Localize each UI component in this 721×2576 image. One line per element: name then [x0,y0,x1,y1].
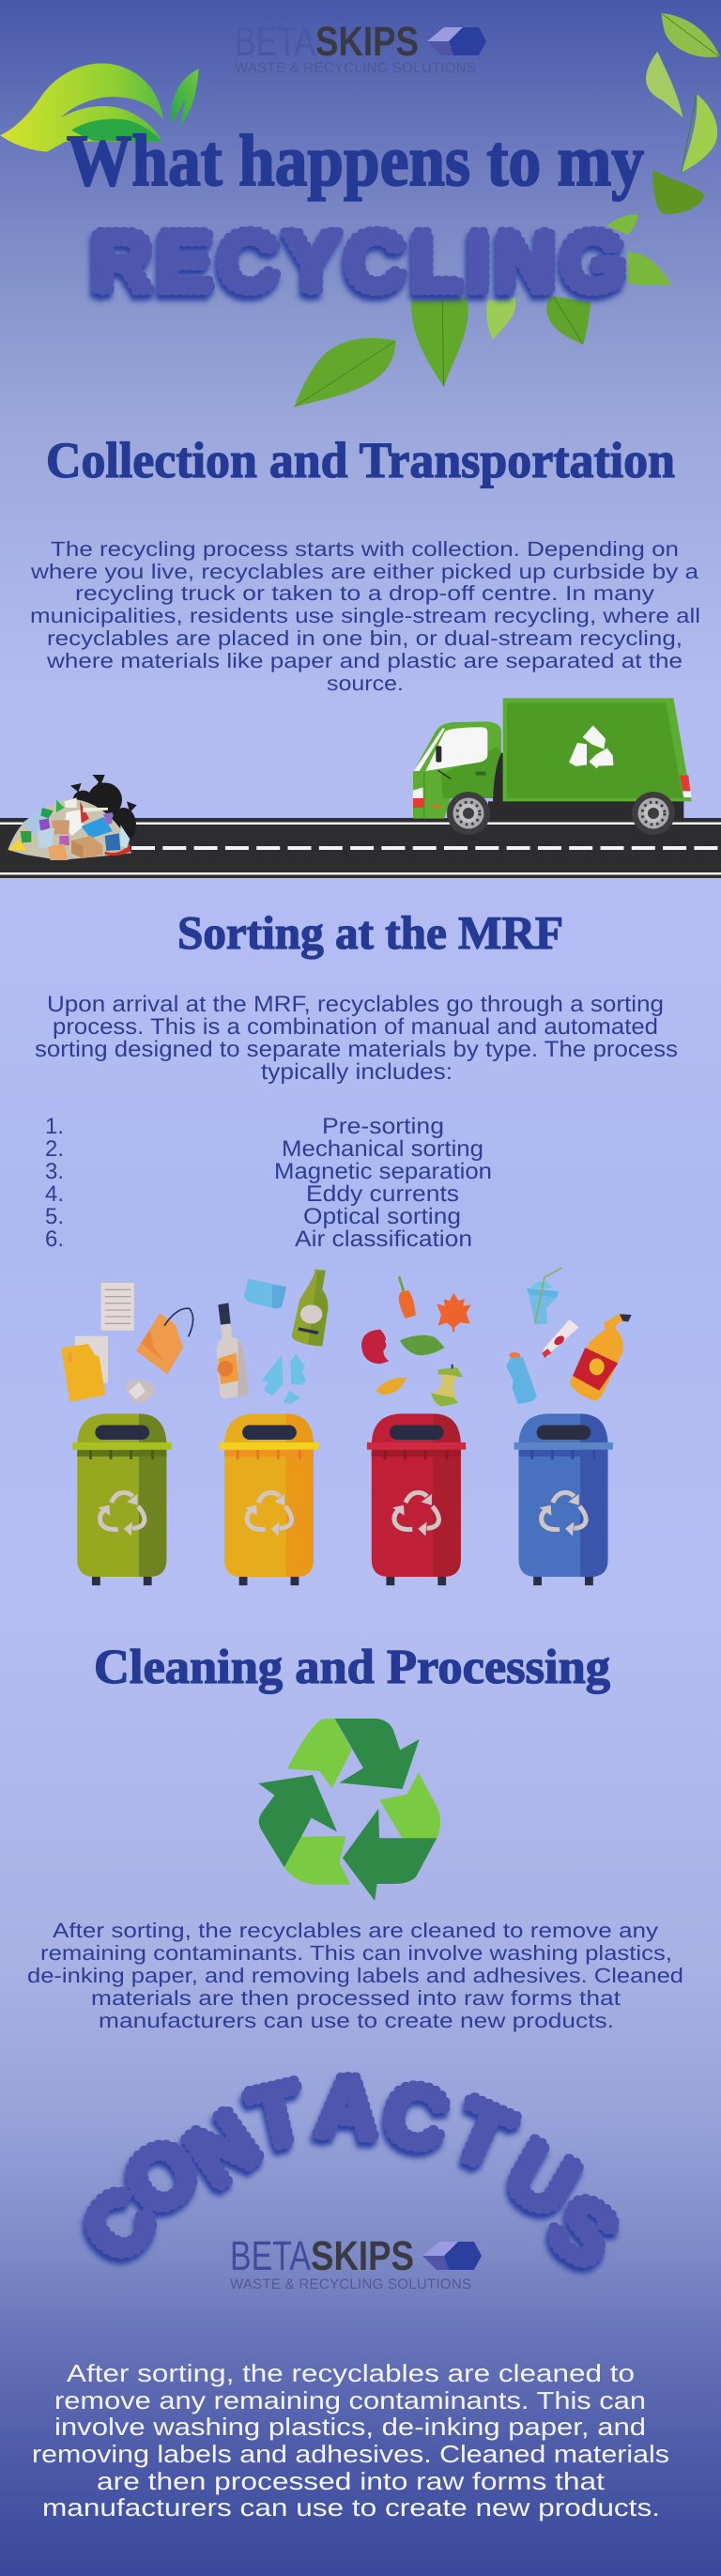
numbered list: 4. [45,1181,64,1207]
icon: recycling truck [413,698,692,819]
panel: sorting at the MRF [35,906,678,1585]
numbered list: Magnetic separation [274,1159,492,1184]
numbered list: 6. [45,1226,64,1252]
text block [35,992,678,1085]
panel: hero header [0,13,720,407]
panel: collection and transportation [0,432,721,878]
icon: blue bin [514,1413,613,1585]
logo [235,19,486,76]
illustration: waste items and bins [62,1268,632,1585]
heading: Cleaning and Processing [94,1641,610,1694]
icon: plastic waste [506,1268,632,1404]
logo: SKIPS [315,19,419,65]
text block [32,2359,669,2522]
heading: arched contact us: N [170,2091,276,2206]
icon: truck front wheel [447,792,490,835]
text block: recycling truck or taken to a drop-off centre. In many [75,581,654,605]
text block: process. This is a combination of manual and automated [53,1014,658,1040]
road [0,818,721,878]
heading: arched contact us: A [314,2058,381,2157]
text block: where materials like paper and plastic are separated at the [46,649,683,672]
icon: organic waste [361,1276,471,1407]
numbered list: Eddy currents [306,1181,459,1207]
panel: contact us [32,2058,669,2522]
numbered list: 2. [45,1136,64,1162]
icon: large green leaf [0,63,199,152]
icon: rubbish pile [8,775,137,860]
icon: red bin [367,1413,466,1585]
text block: remove any remaining contaminants. This can [54,2386,646,2414]
heading: arched contact us [64,2058,635,2287]
logo: WASTE & RECYCLING SOLUTIONS [235,60,476,76]
logo: BETA [235,19,316,65]
logo [230,2233,482,2292]
text block: sorting designed to separate materials by type. The process [35,1037,678,1062]
title: recycling: RECYCLING [91,215,626,309]
numbered list [45,1114,492,1252]
heading: arched contact us: C [64,2169,176,2279]
text block: Upon arrival at the MRF, recyclables go through a sorting [47,992,664,1017]
icon: paper waste [62,1283,193,1402]
text block: source. [327,671,404,695]
numbered list: Optical sorting [303,1204,461,1229]
numbered list: Pre-sorting [322,1114,444,1139]
icon: recycling arrows [258,1719,440,1901]
icon: truck rear wheel [632,792,675,835]
text block [27,1919,683,2032]
numbered list: Mechanical sorting [282,1136,483,1162]
text block: manufacturers can use to create new products. [99,2009,614,2032]
heading: arched contact us: T [240,2063,314,2168]
text block: are then processed into raw forms that [97,2467,606,2495]
text block: municipalities, residents use single-stream recycling, where all [30,604,700,627]
icon: falling leaves [294,13,720,407]
title: What happens to my [67,119,644,201]
numbered list: Air classification [295,1226,472,1252]
logo: SKIPS [311,2233,414,2279]
text block: After sorting, the recyclables are cleaned to remove any [53,1919,658,1942]
heading: arched contact us: S [532,2175,635,2287]
numbered list: 1. [45,1114,64,1139]
text block: where you live, recyclables are either picked up curbside by a [30,560,699,583]
icon: green bin [72,1413,172,1585]
icon: glass waste [217,1270,328,1404]
heading: arched contact us: T [438,2080,526,2189]
numbered list: 3. [45,1159,64,1184]
text block [30,537,700,695]
text block: de-inking paper, and removing labels and adhesives. Cleaned [27,1964,683,1987]
heading: arched contact us: U [491,2121,593,2236]
text block: removing labels and adhesives. Cleaned materials [32,2440,669,2468]
heading: Collection and Transportation [46,432,675,488]
panel: cleaning and processing [27,1641,683,2032]
logo: BETA [230,2233,312,2279]
text block: manufacturers can use to create new products. [42,2493,660,2522]
heading: arched contact us: O [108,2119,216,2235]
text block: remaining contaminants. This can involve washing plastics, [40,1941,672,1965]
text block: After sorting, the recyclables are cleaned to [67,2359,635,2387]
heading: Sorting at the MRF [177,906,563,960]
text block: typically includes: [261,1059,453,1085]
logo: WASTE & RECYCLING SOLUTIONS [230,2276,471,2292]
numbered list: 5. [45,1204,64,1229]
icon: yellow bin [220,1413,318,1585]
text block: The recycling process starts with collection. Depending on [51,537,679,561]
text block: involve washing plastics, de-inking paper, and [54,2413,646,2441]
text block: materials are then processed into raw forms that [91,1986,621,2010]
heading: arched contact us: C [376,2063,456,2170]
text block: recyclables are placed in one bin, or dual-stream recycling, [47,626,683,650]
